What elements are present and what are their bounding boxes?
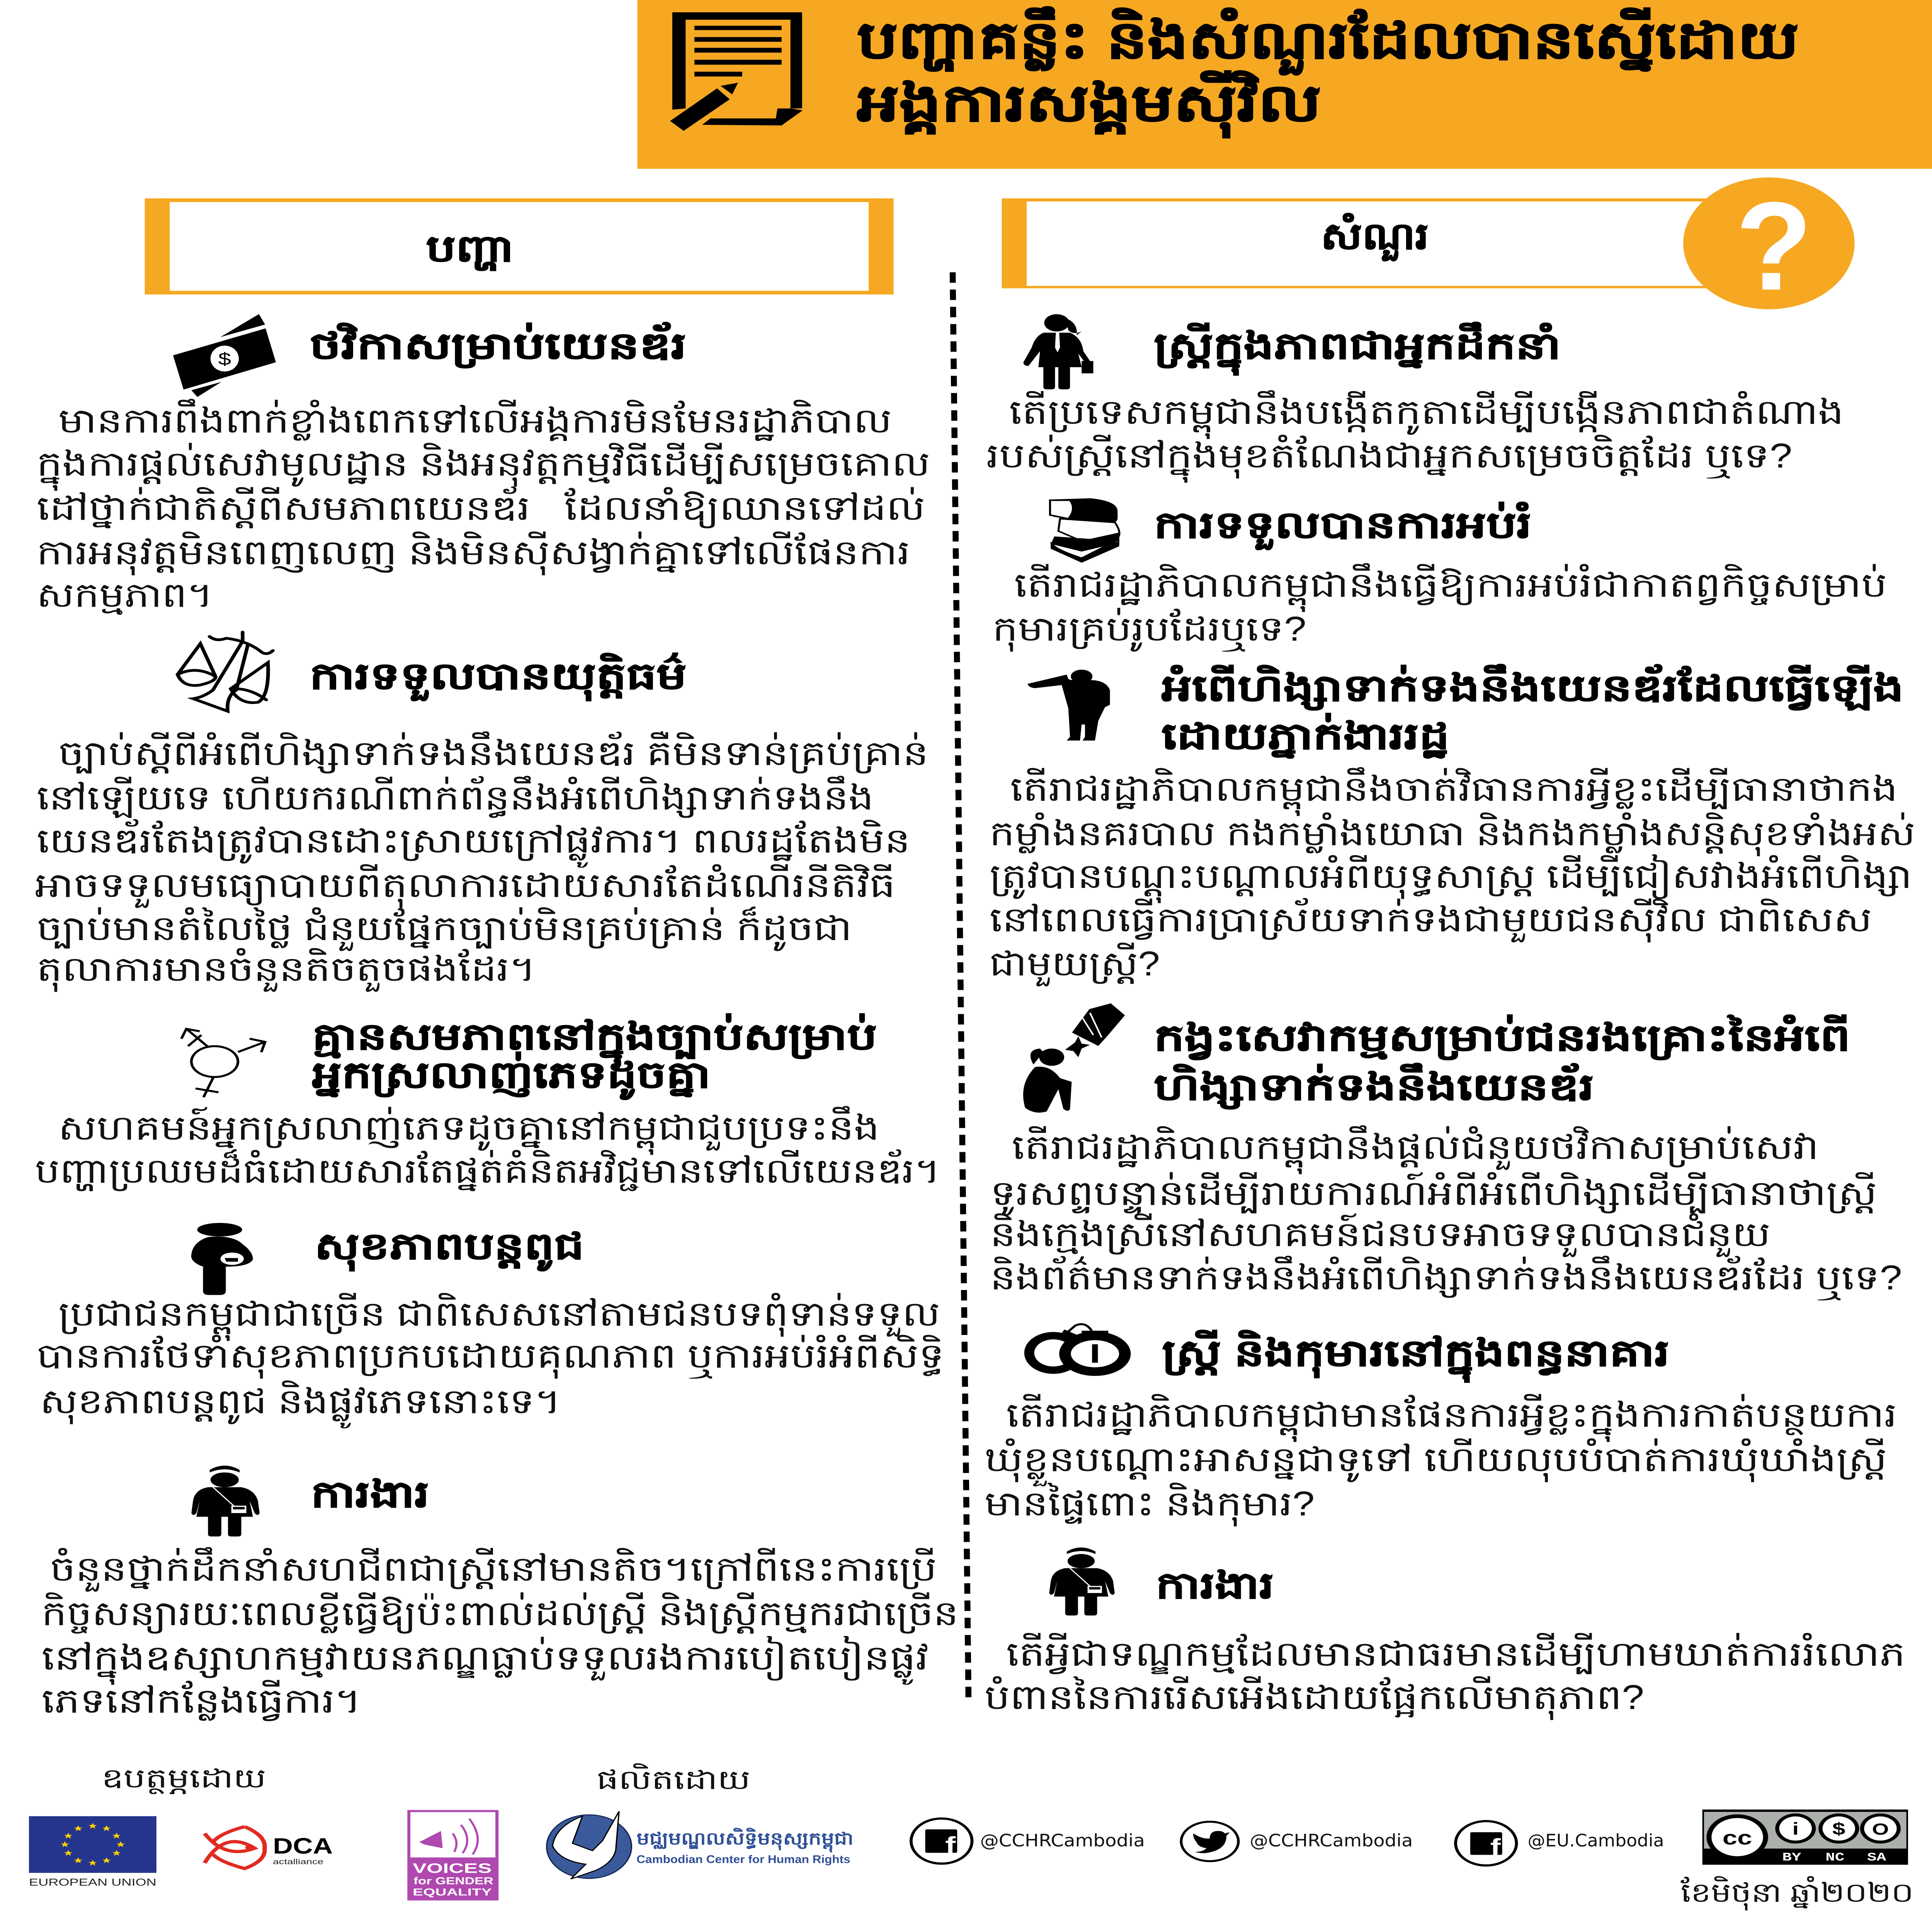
social: CCHR facebook: f <box>945 1832 956 1858</box>
question: lack of services for GBV victims <box>990 1003 1902 1301</box>
section: reproductive health: សុខភាពបន្តពូជ <box>315 1226 584 1271</box>
icon: woman worker <box>1049 1548 1115 1616</box>
icon: businesswoman <box>1024 314 1093 389</box>
question: labour: ការងារ <box>1156 1565 1274 1606</box>
section: access to justice: ច្បាប់មានតំលៃថ្លៃ ជំនួយផ្នែកច្បាប់មិនគ្រប់គ្រាន់ ក៏ដូចជា <box>37 906 852 951</box>
icon: transgender symbol <box>181 1029 265 1097</box>
section: access to justice: ច្បាប់ស្តីពីអំពើហិង្សាទាក់ទងនឹងយេនឌ័រ គឺមិនទាន់គ្រប់គ្រាន់ <box>58 731 929 774</box>
icon: handcuffs <box>1029 1324 1125 1372</box>
icon: woman worker <box>191 1466 260 1536</box>
section: budget for gender: ថវិកាសម្រាប់យេនឌ័រ <box>310 322 687 368</box>
section: access to justice: នៅឡើយទេ ហើយករណីពាក់ព័ន្ធនឹងអំពើហិង្សាទាក់ទងនឹង <box>37 776 874 818</box>
question: lack of services for GBV victims: កង្វះសេវាកម្មសម្រាប់ជនរងគ្រោះនៃអំពើ <box>1154 1015 1850 1060</box>
logo: European Union: EUROPEAN UNION <box>29 1877 156 1888</box>
question: women in leadership: ស្ត្រីក្នុងភាពជាអ្នកដឹកនាំ <box>1154 322 1561 376</box>
divider dotted line <box>953 272 968 1701</box>
icon: banknote: $ <box>218 349 231 369</box>
section: budget for gender: មានការពឹងពាក់ខ្លាំងពេកទៅលើអង្គការមិនមែនរដ្ឋាភិបាល <box>58 399 892 441</box>
logo: Cambodian Center for Human Rights <box>547 1811 854 1879</box>
question: labour <box>985 1548 1905 1720</box>
badge: creative commons: cc <box>1723 1827 1752 1849</box>
section: budget for gender: ក្នុងការផ្តល់សេវាមូលដ្ឋាន និងអនុវត្តកម្មវិធីដើម្បីសម្រេចគោល <box>37 443 930 491</box>
question: access to education: ការទទួលបានការអប់រំ <box>1154 502 1532 550</box>
question: lack of services for GBV victims: ហិង្សាទាក់ទងនឹងយេនឌ័រ <box>1154 1063 1594 1109</box>
section: budget for gender: សកម្មភាព។ <box>37 576 213 615</box>
panel header: questions <box>1002 176 1855 316</box>
section: reproductive health <box>37 1223 944 1429</box>
section: access to justice: យេនឌ័រតែងត្រូវបានដោះស្រាយក្រៅផ្លូវការ។ ពលរដ្ឋតែងមិន <box>37 819 910 868</box>
social: CCHR twitter: @CCHRCambodia <box>1250 1830 1413 1851</box>
badge: creative commons: i <box>1792 1820 1799 1838</box>
icon: banknote <box>173 314 276 397</box>
icon: saluting soldier <box>1027 670 1110 740</box>
section: budget for gender <box>37 314 930 615</box>
badge: creative commons: O <box>1872 1820 1889 1838</box>
label: produced by: ផលិតដោយ <box>597 1763 750 1795</box>
title text: បញ្ហាគន្លឹះ និងសំណួរដែលបានស្នើដោយ <box>857 7 1799 75</box>
social: CCHR twitter <box>1181 1822 1413 1861</box>
question: labour: បំពាននៃការរើសអើងដោយផ្អែកលើមាតុភាព? <box>985 1676 1644 1720</box>
logo: European Union <box>29 1816 156 1888</box>
question: women and children in prison: មានផ្ទៃពោះ និងកុមារ? <box>985 1483 1315 1527</box>
section: LGBT inequality in law: អ្នកស្រលាញ់ភេទដូចគ្នា <box>312 1052 711 1100</box>
badge: creative commons <box>1702 1810 1908 1865</box>
logo: DCA actalliance: actalliance <box>273 1857 323 1866</box>
badge: creative commons: NC <box>1825 1851 1844 1864</box>
logo: Voices for Gender Equality: EQUALITY <box>413 1887 492 1898</box>
logo: Voices for Gender Equality <box>407 1810 498 1900</box>
title banner <box>637 0 1932 169</box>
question: women and children in prison: ស្ត្រី និងកុមារនៅក្នុងពន្ធនាគារ <box>1162 1330 1670 1383</box>
section: LGBT inequality in law: បញ្ហាប្រឈមដ៏ធំដោយសារតែផ្នត់គំនិតអវិជ្ជមានទៅលើយេនឌ័រ។ <box>35 1149 940 1191</box>
panel header: problems: បញ្ហា <box>426 228 514 271</box>
question: women and children in prison <box>985 1324 1897 1527</box>
section: LGBT inequality in law <box>35 1014 940 1191</box>
section: labour: ភេទនៅកន្លែងធ្វើការ។ <box>42 1680 361 1721</box>
icon: stack of books <box>1050 499 1119 562</box>
icon: question mark circle: ? <box>1736 176 1812 316</box>
social: EU facebook: f <box>1490 1834 1501 1860</box>
section: labour <box>42 1466 959 1721</box>
social: EU facebook: @EU.Cambodia <box>1527 1830 1664 1851</box>
section: labour: ចំនួនថ្នាក់ដឹកនាំសហជីពជាស្ត្រីនៅមានតិច។ក្រៅពីនេះការប្រើ <box>50 1547 937 1592</box>
question: women in leadership: របស់ស្ត្រីនៅក្នុងមុខតំណែងជាអ្នកសម្រេចចិត្តដែរ ឬទេ? <box>986 435 1792 483</box>
logo: Cambodian Center for Human Rights: Cambodian Center for Human Rights <box>636 1853 850 1866</box>
panel header: problems <box>145 198 894 294</box>
section: LGBT inequality in law: សហគមន៍អ្នកស្រលាញ់ភេទដូចគ្នានៅកម្ពុជាជួបប្រទះនឹង <box>58 1106 879 1155</box>
section: access to justice <box>35 632 929 992</box>
section: labour: ការងារ <box>311 1474 429 1515</box>
icon: scales of justice <box>178 632 273 711</box>
social: CCHR facebook: @CCHRCambodia <box>980 1830 1145 1851</box>
title text <box>857 7 1799 138</box>
section: reproductive health: ប្រជាជនកម្ពុជាជាច្រើន ជាពិសេសនៅតាមជនបទពុំទាន់ទទួល <box>58 1293 940 1341</box>
question: access to education: កុមារគ្រប់រូបដែរឬទេ? <box>992 608 1306 652</box>
icon: victim and fist <box>1023 1003 1125 1112</box>
question: gender-based violence by state agents <box>990 664 1915 986</box>
section: reproductive health: បានការថែទាំសុខភាពប្រកបដោយគុណភាព ឬការអប់រំអំពីសិទ្ធិ <box>37 1335 944 1379</box>
section: access to justice: ការទទួលបានយុត្តិធម៌ <box>310 653 687 701</box>
section: budget for gender: ដៅថ្នាក់ជាតិស្តីពីសមភាពយេនឌ័រ ដែលនាំឱ្យឈានទៅដល់ <box>37 486 925 529</box>
panel header: questions: សំណួរ <box>1321 213 1429 261</box>
section: LGBT inequality in law: គ្មានសមភាពនៅក្នុងច្បាប់សម្រាប់ <box>312 1014 877 1066</box>
badge: creative commons: BY <box>1782 1851 1801 1864</box>
badge: creative commons: $ <box>1832 1820 1845 1838</box>
section: labour: នៅក្នុងឧស្សាហកម្មវាយនភណ្ឌធ្លាប់ទទួលរងការបៀតបៀនផ្លូវ <box>42 1636 929 1685</box>
logo: Voices for Gender Equality: for GENDER <box>413 1876 493 1886</box>
social: CCHR facebook <box>911 1818 1145 1864</box>
logo: Voices for Gender Equality: VOICES <box>413 1861 492 1876</box>
logo: Cambodian Center for Human Rights: មជ្ឈមណ្ឌលសិទ្ធិមនុស្សកម្ពុជា <box>636 1828 854 1853</box>
question: gender-based violence by state agents: អំពើហិង្សាទាក់ទងនឹងយេនឌ័រដែលធ្វើឡើង <box>1162 664 1904 711</box>
logo: DCA actalliance: DCA <box>273 1834 333 1859</box>
question: gender-based violence by state agents: ជាមួយស្ត្រី? <box>990 943 1160 986</box>
badge: creative commons: SA <box>1867 1851 1886 1864</box>
icon: pregnant woman <box>191 1223 253 1295</box>
question: lack of services for GBV victims: និងក្មេងស្រីនៅសហគមន៍ជនបទអាចទទួលបានជំនួយ <box>990 1213 1770 1257</box>
logo: DCA actalliance <box>205 1827 333 1869</box>
section: reproductive health: សុខភាពបន្តពូជ និងផ្លូវភេទនោះទេ។ <box>40 1381 561 1429</box>
section: access to justice: តុលាការមានចំនួនតិចតួចផងដែរ។ <box>37 948 536 992</box>
section: labour: កិច្ចសន្យារយៈពេលខ្លីធ្វើឱ្យប៉ះពាល់ដល់ស្ត្រី និងស្ត្រីកម្មករជាច្រើន <box>42 1592 959 1634</box>
icon: question mark circle <box>1683 176 1855 316</box>
social: EU facebook <box>1456 1821 1664 1866</box>
question: access to education <box>992 499 1887 652</box>
title text: អង្គការសង្គមស៊ីវិល <box>857 70 1321 138</box>
icon: document and pen <box>670 12 803 131</box>
question: gender-based violence by state agents: ដោយភ្នាក់ងាររដ្ឋ <box>1162 713 1449 759</box>
section: access to justice: អាចទទួលមធ្យោបាយពីតុលាការដោយសារតែដំណើរនីតិវិធី <box>35 864 895 908</box>
label: supported by: ឧបត្ថម្ភដោយ <box>102 1763 266 1794</box>
question: lack of services for GBV victims: តើរាជរដ្ឋាភិបាលកម្ពុជានឹងផ្តល់ជំនួយថវិកាសម្រាប់សេវា <box>1012 1125 1819 1174</box>
section: budget for gender: ការអនុវត្តមិនពេញលេញ និងមិនស៊ីសង្វាក់គ្នាទៅលើផែនការ <box>37 531 910 575</box>
question: women in leadership <box>986 314 1844 483</box>
